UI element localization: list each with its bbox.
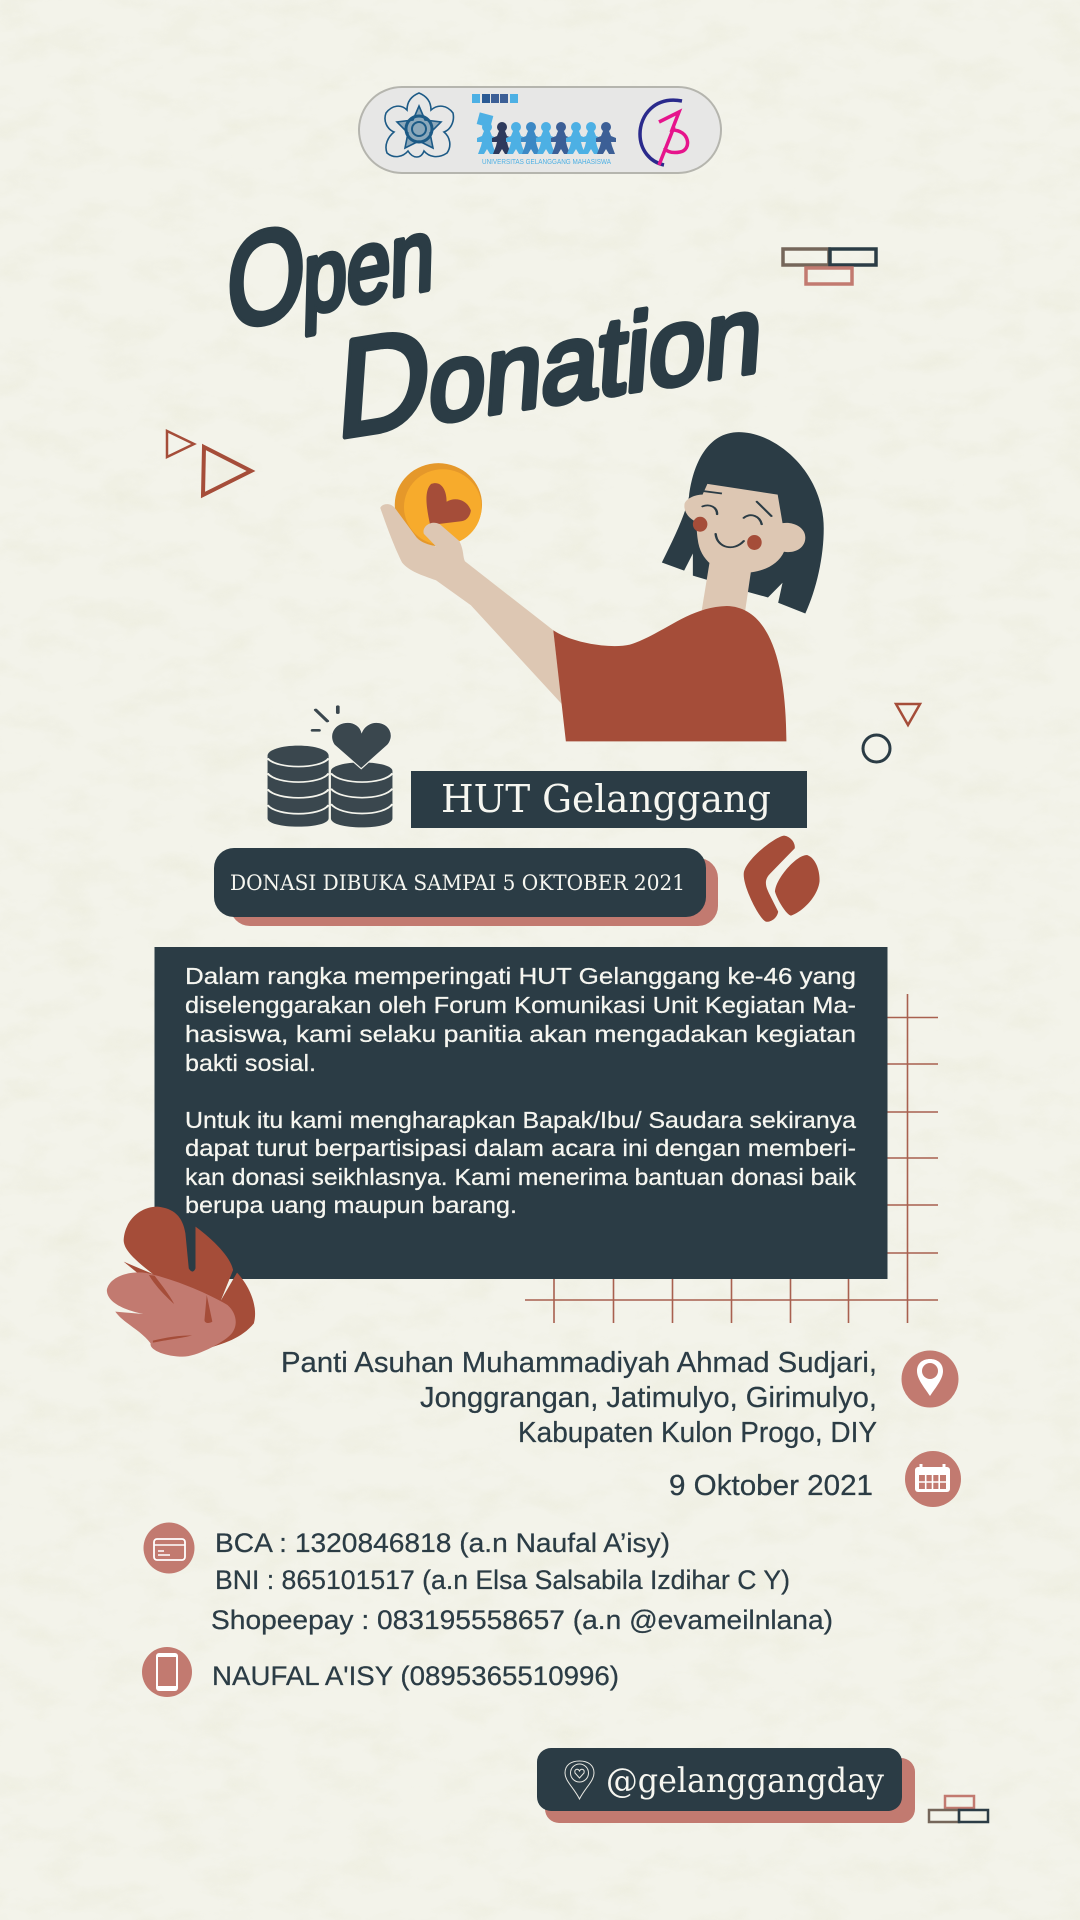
coin heart: [426, 483, 471, 525]
arm and hand: [380, 504, 562, 704]
shirt: [553, 606, 786, 741]
logo pill: [359, 87, 721, 173]
rays: [313, 707, 338, 730]
handle text: @gelanggangday: [606, 1761, 885, 1801]
icon: bank card: [144, 1522, 194, 1574]
text: event date: 9 Oktober 2021: [669, 1470, 873, 1502]
banner: donation deadline: [214, 848, 718, 926]
text: venue address: Kabupaten Kulon Progo, DIY: [518, 1417, 877, 1449]
paragraph 2: kan donasi seikhlasnya. Kami menerima bantuan donasi baik: [185, 1164, 857, 1190]
paragraph 1: diselenggarakan oleh Forum Komunikasi Unit Kegiatan Ma-: [185, 992, 856, 1018]
illustration: woman holding coin: [380, 432, 824, 741]
decoration: bricks bottom: [929, 1796, 988, 1822]
text: bank accounts: Shopeepay : 083195558657 (a.n @evameilnlana): [211, 1605, 833, 1635]
coin: [395, 463, 482, 546]
decoration: monstera leaves: [107, 1207, 255, 1357]
logo: university seal: [385, 93, 453, 157]
text: venue address: Panti Asuhan Muhammadiyah Ahmad Sudjari,: [281, 1347, 877, 1379]
paragraph 2: Untuk itu kami mengharapkan Bapak/Ibu/ Saudara sekiranya: [185, 1107, 856, 1133]
decoration: red leaf shape: [744, 836, 820, 922]
paragraph 2: berupa uang maupun barang.: [185, 1192, 517, 1218]
title: Open: Open: [225, 169, 436, 358]
text: bank accounts: BCA : 1320846818 (a.n Naufal A’isy): [215, 1528, 670, 1558]
paragraph 1: [185, 963, 856, 1076]
eyes and smile: [703, 502, 771, 547]
paragraph 2: dapat turut berpartisipasi dalam acara ini dengan memberi-: [185, 1135, 856, 1161]
paragraph 1: hasiswa, kami selaku panitia akan mengadakan kegiatan: [185, 1021, 856, 1047]
panel: description: [154, 947, 888, 1279]
icon: phone: [142, 1647, 192, 1697]
icon: coin stacks with heart: [268, 707, 392, 827]
paragraph 2: [185, 1107, 857, 1218]
face: [684, 484, 805, 573]
icon: pin with heart: [565, 1761, 594, 1799]
decoration: grid lines: [525, 994, 938, 1323]
logo: Universitas Gelanggang Mahasiswa: UNIVERSITAS GELANGGANG MAHASISWA: [482, 159, 611, 166]
decoration: triangle and circle right: [863, 704, 920, 762]
bangs line: [703, 491, 722, 494]
banner: HUT Gelanggang: [411, 771, 807, 828]
icon: location pin: [902, 1350, 958, 1408]
hair back: [662, 432, 824, 614]
paragraph 1: bakti sosial.: [185, 1050, 316, 1076]
text: bank accounts: BNI : 865101517 (a.n Elsa Salsabila Izdihar C Y): [215, 1565, 790, 1595]
decoration: triangles left: [167, 431, 251, 495]
banner: donation deadline: DONASI DIBUKA SAMPAI 5 OKTOBER 2021: [230, 871, 685, 895]
title: Donation: Donation: [333, 245, 768, 468]
text: venue address: [281, 1347, 877, 1449]
cheeks: [693, 517, 707, 532]
logo: 37 anniversary: [640, 100, 688, 165]
text: bank accounts: [211, 1528, 833, 1635]
text: venue address: Jonggrangan, Jatimulyo, Girimulyo,: [420, 1382, 877, 1414]
neck: [701, 561, 752, 614]
icon: calendar: [905, 1451, 961, 1507]
text: contact person: NAUFAL A'ISY (0895365510996): [212, 1661, 619, 1691]
paragraph 1: Dalam rangka memperingati HUT Gelanggang ke-46 yang: [185, 963, 856, 989]
banner: instagram handle: [537, 1748, 915, 1823]
heart: [331, 722, 391, 769]
decoration: bricks top: [783, 249, 876, 284]
banner: HUT Gelanggang: HUT Gelanggang: [441, 777, 771, 821]
logo: Universitas Gelanggang Mahasiswa: [472, 94, 616, 166]
